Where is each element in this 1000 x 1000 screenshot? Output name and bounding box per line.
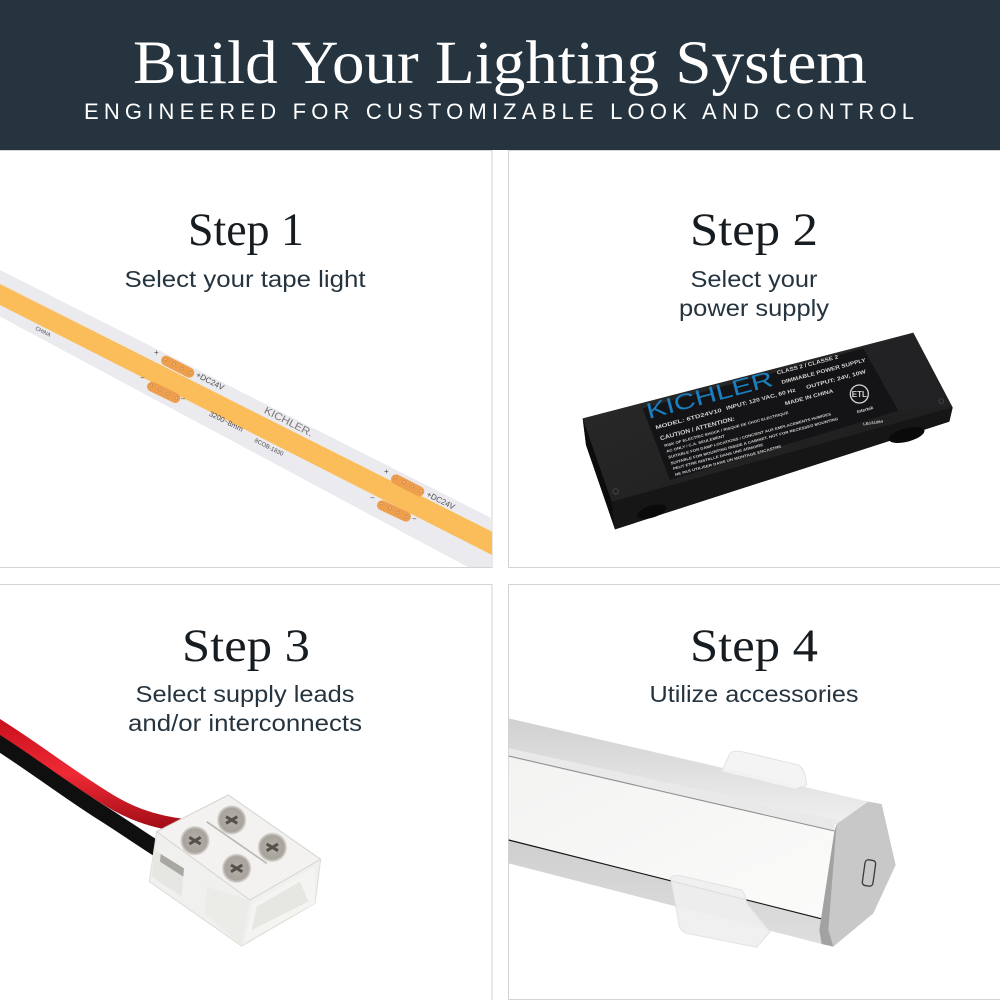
image: power supply: RISK OF ELECTRIC SHOCK / RISQUE DE CHOC ELECTRIQUE: [664, 411, 790, 448]
panel: step 3: [0, 584, 492, 1000]
image: power supply: CLASS 2 / CLASSE 2: [776, 354, 839, 377]
panel: step 1: [0, 150, 492, 580]
header banner: [0, 0, 1000, 150]
image: LED tape light: −: [181, 395, 186, 404]
step 3 description: Select supply leads: [136, 681, 354, 707]
image: power supply: MADE IN CHINA: [784, 388, 834, 407]
image: LED tape light: +: [384, 467, 389, 476]
step 4 description: Utilize accessories: [650, 681, 858, 707]
image: power supply: AC ONLY / C.A. SEULEMENT: [666, 434, 726, 454]
image: LED tape light: −: [412, 515, 417, 524]
image: LED tape light: −: [140, 374, 145, 383]
step 2 description: Select your: [690, 266, 818, 292]
image: power supply: PEUT ETRE INSTALLE DANS UNE ARMOIRE: [673, 443, 764, 471]
step 4 heading: Step 4: [690, 620, 818, 672]
panel: step 4: [508, 584, 1000, 1000]
image: LED tape light: CHINA: [34, 326, 52, 339]
image: power supply: KICHLER: [643, 366, 776, 424]
image: LED tape light: 8COB-1830: [253, 438, 285, 458]
subtitle: ENGINEERED FOR CUSTOMIZABLE LOOK AND CONTROL: [84, 99, 914, 124]
image: power supply: [583, 333, 953, 529]
image: aluminum channel: [509, 718, 896, 947]
image: power supply: OUTPUT: 24V, 10W: [806, 369, 868, 391]
step 1 description: Select your tape light: [124, 266, 366, 292]
image: power supply: INPUT: 120 VAC, 60 Hz: [726, 387, 797, 412]
image: LED tape light: +DC24V: [425, 490, 457, 512]
image: power supply: DIMMABLE POWER SUPPLY: [781, 357, 867, 386]
image: power supply: SUITABLE FOR MOUNTING INSIDE A CABINET. NOT FOR RECESSED MOUNTING: [670, 417, 839, 466]
step 2 description: power supply: [679, 295, 830, 321]
image: LED tape light: +DC24V: [194, 370, 226, 393]
image: LED tape light: [0, 270, 492, 580]
step 3 heading: Step 3: [182, 620, 310, 672]
image: power supply: MODEL: 6TD24V10: [655, 408, 723, 431]
image: power supply: Intertek: [856, 405, 874, 414]
clip: top mounting clip: [722, 751, 807, 789]
step 2 heading: Step 2: [690, 204, 818, 256]
step 2 description: [679, 266, 830, 321]
image: wire connector: [0, 721, 321, 946]
title: Build Your Lighting System: [133, 30, 867, 97]
image: power supply: SUITABLE FOR DAMP LOCATIONS / CONCIENT AUX EMPLACEMENTS HUMIDES: [668, 412, 832, 460]
clip: bottom mounting clip: [671, 876, 770, 947]
image: power supply: NE PAS UTILISER DANS UN MONTAGE ENCASTRE: [675, 444, 783, 477]
step 1 heading: Step 1: [188, 204, 304, 256]
step 3 description: and/or interconnects: [128, 710, 362, 736]
panel: step 2: [508, 150, 1000, 568]
image: LED tape light: KICHLER.: [262, 406, 314, 440]
image: power supply: CAUTION / ATTENTION:: [660, 417, 736, 442]
image: LED tape light: +: [154, 348, 159, 357]
image: power supply: ETL: [852, 390, 867, 399]
step 3 description: [128, 681, 362, 736]
image: power supply: LB131284: [863, 419, 884, 426]
image: LED tape light: 3200~8mm: [208, 409, 245, 434]
image: LED tape light: −: [370, 494, 375, 503]
